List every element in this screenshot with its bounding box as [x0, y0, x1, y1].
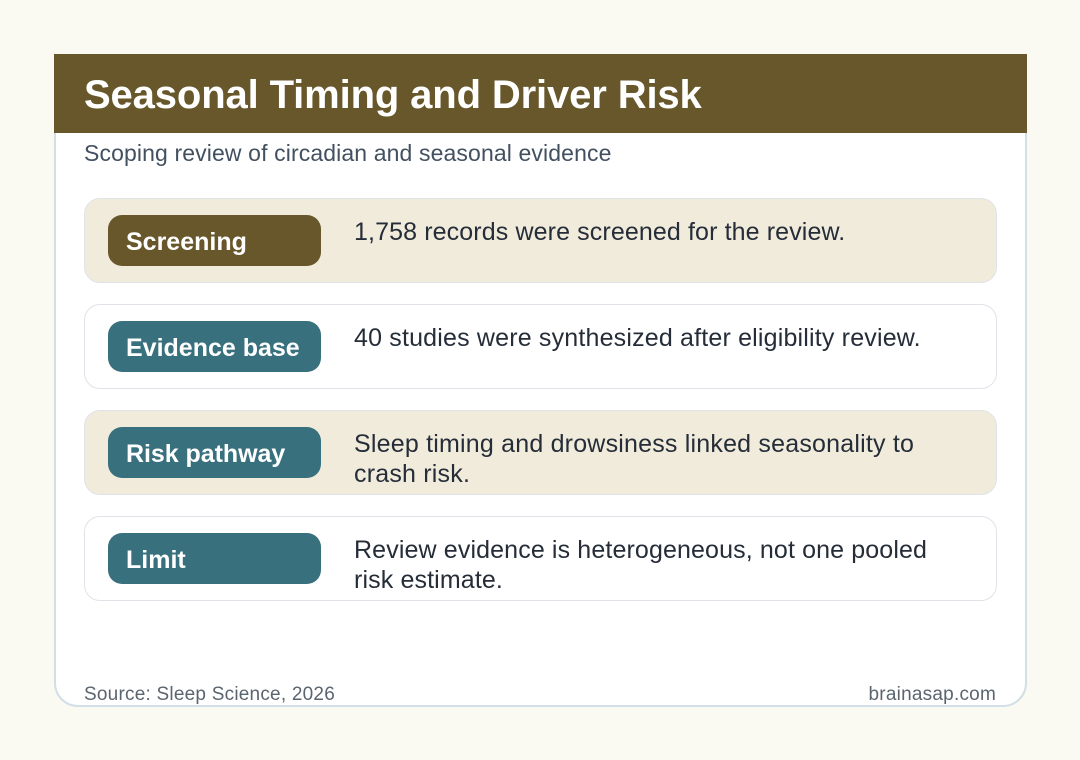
label: screening — [108, 215, 321, 266]
text: screening: 1,758 records were screened for the review. — [354, 218, 845, 246]
label: limit — [108, 533, 321, 584]
row: limit — [84, 516, 997, 601]
label: screening: Screening — [126, 228, 247, 256]
header band — [54, 54, 1027, 133]
subtitle: Scoping review of circadian and seasonal evidence — [84, 140, 612, 166]
row: screening — [84, 198, 997, 283]
site credit: brainasap.com — [869, 684, 996, 705]
label: limit: Limit — [126, 546, 186, 574]
text: limit: Review evidence is heterogeneous, not one pooled risk estimate. — [354, 536, 927, 594]
text: evidence base: 40 studies were synthesized after eligibility review. — [354, 324, 921, 352]
text: risk pathway: Sleep timing and drowsiness linked seasonality to crash risk. — [354, 430, 914, 488]
source note: Source: Sleep Science, 2026 — [84, 684, 335, 705]
label: risk pathway — [108, 427, 321, 478]
title: Seasonal Timing and Driver Risk — [84, 73, 702, 117]
label: risk pathway: Risk pathway — [126, 440, 285, 468]
label: evidence base: Evidence base — [126, 334, 300, 362]
row: evidence base — [84, 304, 997, 389]
panel: card — [54, 54, 1027, 707]
label: evidence base — [108, 321, 321, 372]
row: risk pathway — [84, 410, 997, 495]
